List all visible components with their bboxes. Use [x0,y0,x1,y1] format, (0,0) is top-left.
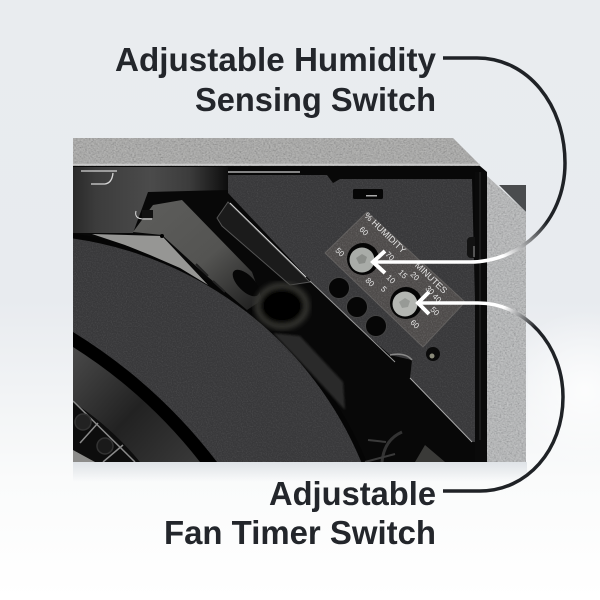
control label plate [325,210,465,347]
humidity knob [347,243,379,275]
switch panel [228,172,480,442]
dial labels: 50 [333,246,346,259]
indicator buttons [328,278,386,336]
fan housing [73,236,364,462]
dial labels: 60 [408,318,421,331]
callout: humidity switch [373,58,565,273]
galvanized wedge [92,234,208,285]
dial labels: MINUTES [413,260,449,296]
heading: humidity switch: Adjustable Humidity [115,41,437,78]
callout: timer switch [418,292,563,491]
heading: timer switch [164,475,436,551]
timer knob [390,287,422,319]
channel reflection [217,202,395,362]
dial labels: 10 [384,273,397,286]
dial labels: 70 [383,250,396,263]
dial labels: 80 [363,276,376,289]
dial labels: 50 [428,305,441,318]
arrowhead: timer [418,292,429,314]
heading: timer switch: Adjustable [269,475,436,512]
inner dark ring [73,332,217,462]
dial labels [333,210,449,331]
dial labels: 30 [423,284,436,297]
dial labels: 20 [408,270,421,283]
dial labels: 5 [379,284,389,294]
dial labels: % HUMIDITY [362,210,408,255]
angled metal box [133,200,264,310]
photo: fan housing with switches [73,138,526,462]
fan grille details [73,401,135,462]
upper left metal plate [73,167,228,233]
galvanized metal frame [73,138,526,462]
heading: timer switch: Fan Timer Switch [164,514,436,551]
screw [426,347,440,361]
heading: humidity switch [115,41,437,118]
dial labels: 40 [430,292,443,305]
dial labels: 15 [396,268,409,281]
right side frame [365,172,487,462]
arrowhead: humidity [373,251,385,273]
black enclosure [73,166,487,462]
heading: humidity switch: Sensing Switch [195,81,436,118]
lower metal sliver [273,333,345,410]
dial labels: 60 [357,225,370,238]
